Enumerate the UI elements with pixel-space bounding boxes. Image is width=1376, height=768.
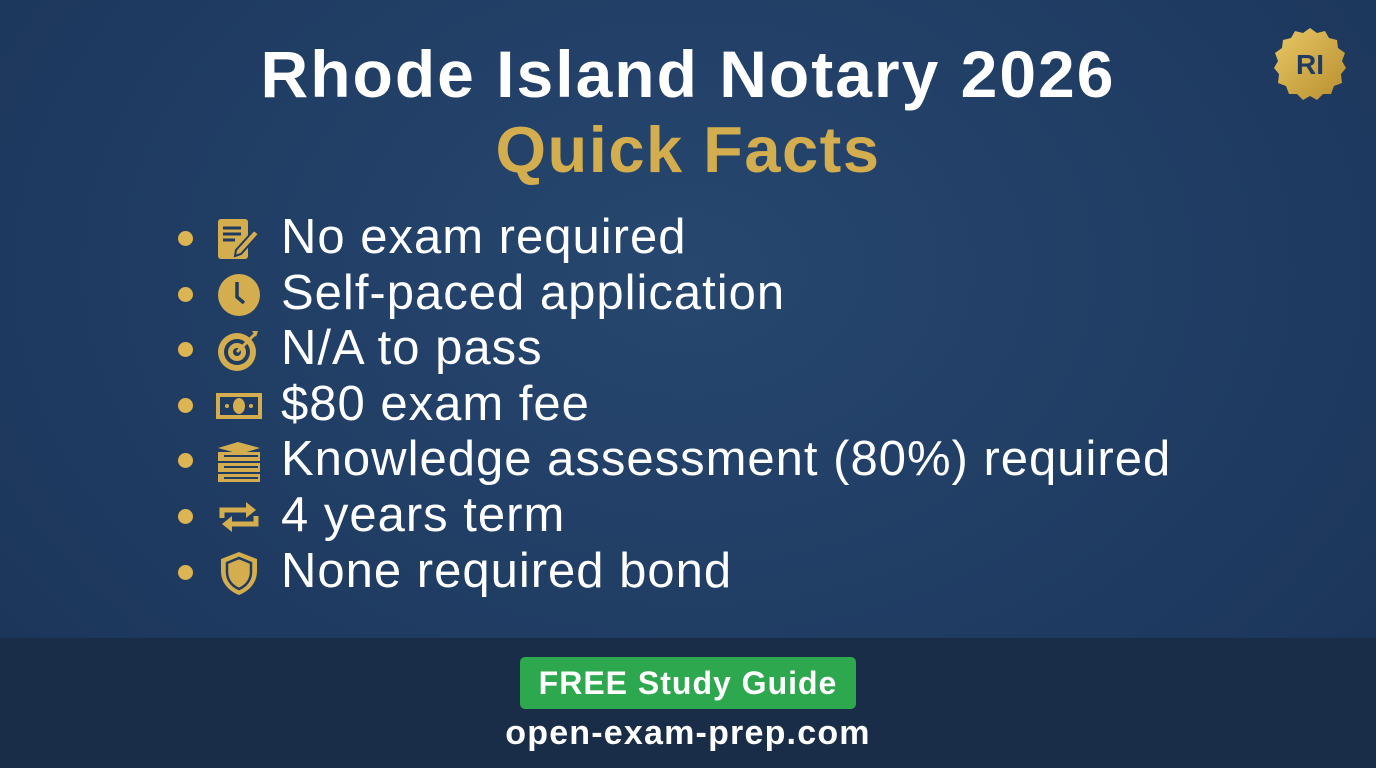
button: free study guide: FREE Study Guide [539,665,837,701]
subtitle: Quick Facts [496,113,880,186]
item: term: 4 years term [281,488,565,542]
footer bar [0,638,1376,768]
button: free study guide [520,657,856,709]
badge: RI seal [1274,28,1346,100]
item: no exam: No exam required [281,210,686,264]
fact list [178,210,1171,598]
title: Rhode Island Notary 2026 [261,37,1115,111]
item: bond: None required bond [281,544,732,598]
item: self-paced: Self-paced application [281,266,785,320]
footer url: open-exam-prep.com [505,714,871,752]
item: knowledge: Knowledge assessment (80%) required [281,432,1171,486]
item: pass: N/A to pass [281,321,543,375]
badge: RI seal: RI [1296,49,1324,80]
item: fee: $80 exam fee [281,377,590,431]
